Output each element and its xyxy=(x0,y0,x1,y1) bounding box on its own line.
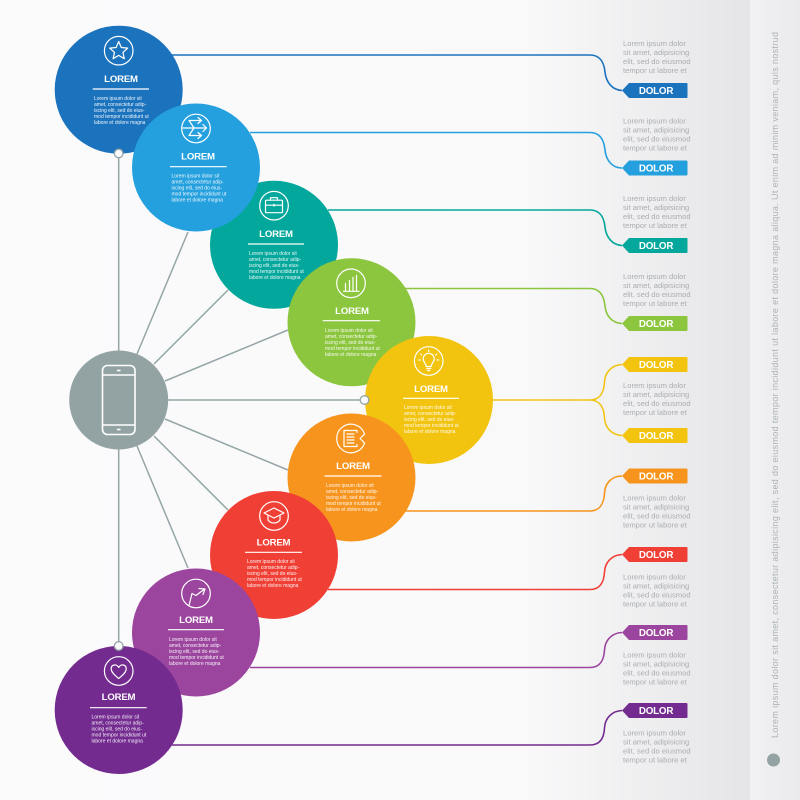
icon: graduation cap xyxy=(260,502,288,530)
body text: amet, consectetur adip- xyxy=(94,102,147,108)
callout: row 8 xyxy=(622,625,691,686)
body text: iscing elit, sed do eius- xyxy=(326,495,377,501)
callout: row 8: DOLOR xyxy=(639,628,673,639)
body text: amet, consectetur adip- xyxy=(326,489,379,495)
callout: row 5: tempor ut labore et xyxy=(623,408,688,417)
body text: labore et dolore magna xyxy=(249,275,301,281)
callout: row 7: DOLOR xyxy=(639,550,673,561)
body text: iscing elit, sed do eius- xyxy=(249,263,300,269)
panel: circle 3 teal xyxy=(210,181,338,309)
body text: mod tempor incididunt ut xyxy=(169,655,224,661)
body text: Lorem ipsum dolor sit xyxy=(249,251,297,257)
callout: row 6: tempor ut labore et xyxy=(623,520,688,530)
body text: iscing elit, sed do eius- xyxy=(92,726,142,732)
callout: row 2 xyxy=(622,116,691,176)
body text: Lorem ipsum dolor sit xyxy=(94,96,142,102)
body text: labore et dolore magna xyxy=(325,352,377,358)
body text: iscing elit, sed do eius- xyxy=(404,417,455,423)
callout: row 3: sit amet, adipisicing xyxy=(623,203,689,212)
body text: mod tempor incididunt ut xyxy=(247,577,302,583)
body text: mod tempor incididunt ut xyxy=(404,423,459,429)
callout: row 8: sit amet, adipisicing xyxy=(623,660,689,668)
connector lines to tags xyxy=(172,55,622,745)
callout: row 2: elit, sed do eiusmod xyxy=(623,134,691,144)
callout: row 1: sit amet, adipisicing xyxy=(623,48,689,57)
icon: star xyxy=(104,36,133,65)
body text: Lorem ipsum dolor sit xyxy=(172,174,220,180)
callout: row 4 xyxy=(622,272,691,331)
panel: right side strip xyxy=(750,0,800,800)
heading: LOREM xyxy=(102,692,136,703)
icon: document xyxy=(337,424,365,453)
body text: amet, consectetur adip- xyxy=(92,720,144,726)
body text: mod tempor incididunt ut xyxy=(92,732,147,738)
body text: Lorem ipsum dolor sit xyxy=(247,559,295,565)
icon: light bulb xyxy=(414,347,443,375)
icon: smartphone xyxy=(102,366,135,434)
body text: iscing elit, sed do eius- xyxy=(172,186,222,192)
callout: row 6: DOLOR xyxy=(639,472,673,482)
callout: row 5: DOLOR xyxy=(639,360,673,371)
callout: row 1: Lorem ipsum dolor xyxy=(623,39,686,48)
callout: row 6 xyxy=(622,468,691,530)
callout: row 5 xyxy=(622,357,691,443)
body text: labore et dolore magna xyxy=(247,583,299,589)
body text: iscing elit, sed do eius- xyxy=(325,340,376,346)
panel: circle 9 dark purple xyxy=(55,646,183,774)
body text: Lorem ipsum dolor sit xyxy=(92,714,140,720)
callout: row 5: sit amet, adipisicing xyxy=(623,390,689,399)
callout: row 9: DOLOR xyxy=(639,706,673,717)
panel: circle 6 orange xyxy=(288,414,416,542)
body text: Lorem ipsum dolor sit xyxy=(326,483,374,489)
body text: Lorem ipsum dolor sit xyxy=(404,405,452,411)
callout: row 5: Lorem ipsum dolor xyxy=(623,381,686,390)
callout: row 8: elit, sed do eiusmod xyxy=(623,668,691,678)
callout: row 3: DOLOR xyxy=(639,241,673,252)
callout: row 7: elit, sed do eiusmod xyxy=(623,590,691,600)
callout: row 7 xyxy=(622,547,691,608)
callout: row 9: Lorem ipsum dolor xyxy=(623,728,686,738)
panel: circle 8 purple xyxy=(132,568,260,696)
callout: row 3 xyxy=(622,194,691,253)
icon: heart xyxy=(104,657,133,685)
body text: amet, consectetur adip- xyxy=(404,411,457,417)
callout: row 1: DOLOR xyxy=(639,86,673,97)
body text: iscing elit, sed do eius- xyxy=(247,571,298,577)
callout: row 5: DOLOR xyxy=(639,431,673,442)
spokes from hub to circles xyxy=(119,153,365,646)
body text: amet, consectetur adip- xyxy=(249,257,302,263)
body text: mod tempor incididunt ut xyxy=(326,501,381,507)
body text: labore et dolore magna xyxy=(92,738,143,744)
body text: amet, consectetur adip- xyxy=(172,180,224,186)
heading: LOREM xyxy=(104,74,138,85)
callout: row 7: Lorem ipsum dolor xyxy=(623,572,686,582)
callout: row 8: Lorem ipsum dolor xyxy=(623,650,686,660)
callout: row 1: tempor ut labore et xyxy=(623,66,688,75)
heading: LOREM xyxy=(257,538,291,548)
body text: Lorem ipsum dolor sit xyxy=(169,637,217,643)
callout: row 4: elit, sed do eiusmod xyxy=(623,290,691,299)
callout: row 2: tempor ut labore et xyxy=(623,144,688,152)
panel: circle 7 red xyxy=(210,491,338,619)
callout: row 9: tempor ut labore et xyxy=(623,756,688,764)
callout: row 7: sit amet, adipisicing xyxy=(623,582,689,590)
callout: row 5: elit, sed do eiusmod xyxy=(623,399,691,408)
junction nodes xyxy=(114,149,369,650)
panel: circle 1 blue xyxy=(55,26,183,154)
callout: row 3: Lorem ipsum dolor xyxy=(623,194,686,203)
callout: row 2: Lorem ipsum dolor xyxy=(623,116,686,126)
callout: row 1: elit, sed do eiusmod xyxy=(623,57,691,66)
callout: row 4: sit amet, adipisicing xyxy=(623,281,689,290)
strip dot xyxy=(767,754,780,766)
callout: row 2: DOLOR xyxy=(639,164,673,174)
callout: row 9 xyxy=(622,703,691,764)
callout: row 6: Lorem ipsum dolor xyxy=(623,494,686,502)
body text: mod tempor incididunt ut xyxy=(249,269,304,275)
body text: labore et dolore magna xyxy=(169,661,221,667)
icon: arrows xyxy=(182,114,210,143)
heading: LOREM xyxy=(181,152,215,162)
body text: mod tempor incididunt ut xyxy=(325,346,380,352)
callout: row 9: elit, sed do eiusmod xyxy=(623,746,691,756)
panel: circle 5 yellow xyxy=(365,336,493,464)
vertical text: Lorem ipsum dolor sit amet, consectetur adipisicing elit, sed do eiusmod tempor incididunt ut labore et dolore magna aliqua. Ut enim ad minim veniam, quis nostrud xyxy=(770,32,780,738)
heading: LOREM xyxy=(179,615,213,626)
body text: iscing elit, sed do eius- xyxy=(169,649,220,655)
heading: LOREM xyxy=(414,384,448,395)
panel: circle 2 light blue xyxy=(132,104,260,232)
callout: row 8: tempor ut labore et xyxy=(623,678,688,686)
callout: row 7: tempor ut labore et xyxy=(623,600,688,608)
callout: row 4: DOLOR xyxy=(639,319,673,330)
callout: row 2: sit amet, adipisicing xyxy=(623,126,689,134)
panel: circle 4 green xyxy=(288,258,416,386)
body text: amet, consectetur adip- xyxy=(169,643,222,649)
callout: row 3: elit, sed do eiusmod xyxy=(623,212,691,221)
body text: amet, consectetur adip- xyxy=(325,334,378,340)
heading: LOREM xyxy=(336,461,370,472)
body text: amet, consectetur adip- xyxy=(247,565,300,571)
body text: iscing elit, sed do eius- xyxy=(94,108,145,114)
callout: row 4: tempor ut labore et xyxy=(623,299,688,308)
panel: hub circle with phone xyxy=(69,350,168,450)
callout: row 4: Lorem ipsum dolor xyxy=(623,272,686,281)
body text: labore et dolore magna xyxy=(94,120,146,126)
body text: labore et dolore magna xyxy=(172,198,223,204)
callout: row 6: sit amet, adipisicing xyxy=(623,502,689,512)
callout: row 3: tempor ut labore et xyxy=(623,221,688,230)
heading: LOREM xyxy=(335,306,369,317)
icon: briefcase xyxy=(260,191,288,220)
icon: bar chart xyxy=(337,269,365,298)
callout: row 1 xyxy=(622,39,691,98)
callout: row 9: sit amet, adipisicing xyxy=(623,738,689,746)
body text: mod tempor incididunt ut xyxy=(172,192,227,198)
heading: LOREM xyxy=(259,229,293,240)
body text: labore et dolore magna xyxy=(404,429,456,435)
body text: mod tempor incididunt ut xyxy=(94,114,149,120)
body text: labore et dolore magna xyxy=(326,507,378,513)
body text: Lorem ipsum dolor sit xyxy=(325,328,373,334)
callout: row 6: elit, sed do eiusmod xyxy=(623,512,691,520)
icon: trend arrow xyxy=(182,579,210,608)
